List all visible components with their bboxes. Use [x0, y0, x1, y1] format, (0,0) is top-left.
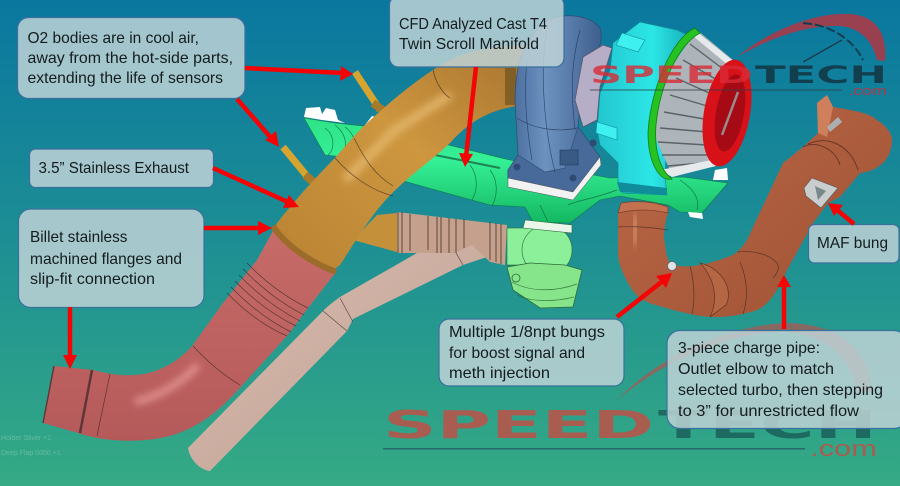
wastegate: green — [507, 220, 582, 308]
callout: O2 bodies: O2 bodies are in cool air, — [28, 30, 199, 47]
arrow: to billet flange — [204, 221, 272, 235]
charge pipe: copper — [618, 95, 892, 317]
callout: CFD manifold: CFD Analyzed Cast T4 — [399, 16, 547, 33]
callout: billet flanges: Billet stainless — [30, 229, 128, 246]
callout: CFD manifold: Twin Scroll Manifold — [399, 36, 539, 53]
callout: CFD manifold — [390, 0, 564, 67]
arrow: to MAF bung — [828, 203, 854, 224]
callout: MAF bung — [808, 224, 899, 263]
O2 sensor 2 — [283, 147, 317, 185]
callout: charge pipe — [667, 330, 900, 428]
compressor housing: cyan — [596, 22, 690, 195]
callout: stainless exhaust: 3.5” Stainless Exhaust — [38, 160, 190, 177]
faint CAD labels: Holder Sliver +1 — [1, 435, 51, 442]
callout: billet flanges — [18, 209, 204, 308]
top SpeedTech logo: .com — [848, 83, 887, 98]
dump tube: tan pipe — [188, 235, 503, 471]
callout: O2 bodies: away from the hot-side parts, — [28, 50, 233, 67]
arrow: to upper O2 sensor — [245, 66, 353, 81]
faint CAD labels: Deep Flap 0050 +1 — [1, 450, 61, 457]
arrow: to NPT bung — [617, 273, 672, 317]
O2 sensor 1 — [355, 72, 385, 112]
manifold: green log — [304, 107, 728, 223]
callout: MAF bung: MAF bung — [817, 235, 888, 252]
turbine housing: blue — [508, 16, 601, 200]
callout: charge pipe: 3-piece charge pipe: — [678, 340, 820, 357]
arrow: to manifold — [459, 67, 476, 167]
callout: O2 bodies — [18, 18, 245, 98]
arrow: to stainless exhaust — [213, 168, 299, 208]
top SpeedTech logo: TECH — [755, 61, 887, 89]
arrow: to lower O2 sensor — [237, 99, 279, 147]
faint CAD labels — [1, 435, 61, 457]
bottom SpeedTech logo — [383, 323, 877, 461]
callout: NPT bungs: for boost signal and — [449, 345, 585, 362]
callout: stainless exhaust — [30, 149, 214, 188]
callout: charge pipe: to 3” for unrestricted flow — [678, 403, 859, 420]
bottom SpeedTech logo: TECH — [658, 403, 877, 447]
callout: billet flanges: machined flanges and — [30, 251, 182, 268]
callout: NPT bungs: Multiple 1/8npt bungs — [449, 324, 605, 341]
callout: charge pipe: Outlet elbow to match — [678, 361, 834, 378]
top logo arc — [737, 14, 885, 61]
top SpeedTech logo: SPEED — [590, 61, 753, 89]
callout: O2 bodies: extending the life of sensors — [28, 70, 223, 87]
exhaust: gold pipe — [273, 45, 525, 272]
top SpeedTech logo — [590, 23, 887, 98]
center bearing housing — [575, 45, 612, 127]
callout: billet flanges: slip-fit connection — [30, 271, 155, 288]
arrow: to charge pipe — [777, 275, 791, 329]
callout: NPT bungs: meth injection — [449, 365, 550, 382]
callout: NPT bungs — [439, 319, 624, 386]
downpipe: red pipe — [43, 227, 336, 441]
arrow: to downpipe — [63, 307, 77, 369]
bottom SpeedTech logo: SPEED — [383, 403, 654, 447]
callout: charge pipe: selected turbo, then stepping — [678, 382, 883, 399]
air filter — [648, 28, 759, 179]
bottom SpeedTech logo: .com — [810, 436, 877, 461]
wastegate pipe: gold and bellows — [353, 212, 507, 265]
